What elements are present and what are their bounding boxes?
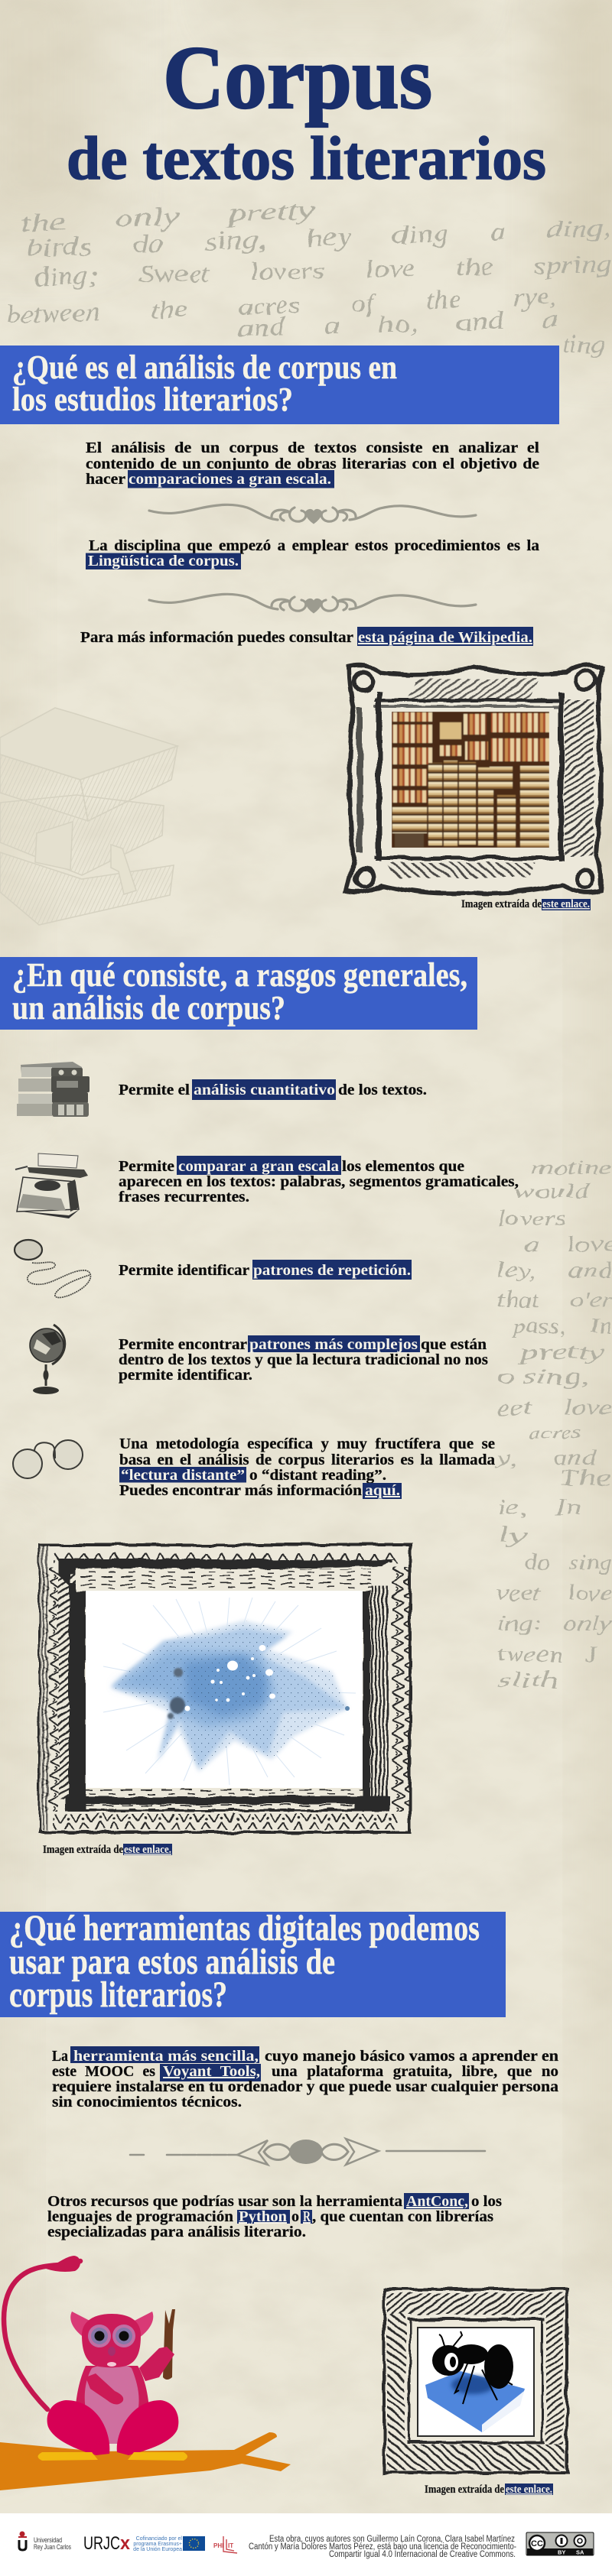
left arm (86, 2373, 123, 2405)
icon: pocket watch (15, 1240, 90, 1298)
text: comparar a gran escala: comparar a gran escala (178, 1158, 339, 1175)
text block: definición: hacer (86, 471, 125, 488)
text block: definición: El análisis de un corpus de textos consiste en analizar el (86, 440, 539, 456)
icon: stack of old books (17, 1062, 90, 1117)
text: patrones más complejos: Permite encontrar (119, 1336, 247, 1353)
text block: disciplina: La disciplina que empezó a emplear estos procedimientos es la (89, 537, 539, 554)
text block: Voyant Tools: requiere instalarse en tu ordenador y que puede usar cualquier persona (52, 2078, 558, 2095)
text block: Voyant Tools: herramienta más sencilla, (73, 2048, 259, 2065)
text: lectura distante: basa en el análisis de corpus literarios es la llamada (119, 1452, 495, 1468)
text block: Voyant Tools: cuyo manejo básico vamos a aprender en (265, 2048, 558, 2065)
license text: Cantón y María Dolores Martos Pérez, está bajo una licencia de Reconocimiento- (249, 2542, 516, 2552)
picture frame with network graph (38, 1545, 410, 1832)
text: lectura distante (119, 1436, 495, 1499)
text: patrones más complejos: permite identificar. (119, 1367, 252, 1384)
logo: URJCx: URJC (83, 2533, 120, 2554)
head (82, 2314, 141, 2367)
caption 3: Imagen extraída de (425, 2484, 504, 2496)
caption 2: este enlace. (124, 1844, 171, 1856)
handwriting: right background: slith (497, 1669, 558, 1692)
caption 3: este enlace. (506, 2484, 552, 2496)
text block: más información (80, 627, 533, 646)
logo: Erasmus+ EU co-funding: de la Unión Europea (133, 2547, 182, 2552)
ornament divider 1 (149, 504, 476, 523)
heading banner 3: corpus literarios? (9, 1974, 227, 2015)
logo: PHILLIT: IT (228, 2542, 233, 2549)
logo: Universidad Rey Juan Carlos: Rey Juan Carlos (34, 2543, 71, 2551)
logo: PHILLIT (213, 2536, 237, 2553)
handwriting: right background: lovers (497, 1207, 566, 1231)
text block: Voyant Tools: La (52, 2048, 68, 2065)
handwriting: right background (494, 1157, 612, 1692)
text: análisis cuantitativo: análisis cuantitativo (194, 1082, 335, 1098)
text block: más información: Para más información puedes consultar (80, 629, 353, 646)
heading banner 3: ¿Qué herramientas digitales podemos (9, 1908, 480, 1948)
handwriting: right background: ing: only (497, 1612, 612, 1636)
text: lectura distante: o “distant reading”. (249, 1467, 386, 1484)
icon: Creative Commons BY-SA badge: SA (576, 2548, 584, 2556)
handwriting: top background: the only pretty (20, 196, 315, 238)
branch (0, 2432, 291, 2490)
right arm (139, 2347, 174, 2381)
text block: otros recursos: Otros recursos que podrías usar son la herramienta (47, 2193, 402, 2210)
license text: Compartir Igual 4.0 Internacional de Creative Commons. (329, 2550, 516, 2559)
text: lectura distante: aquí. (365, 1482, 400, 1499)
ears (70, 2312, 96, 2338)
handwriting: top background (5, 196, 612, 358)
heading banner 2: ¿En qué consiste, a rasgos generales, (12, 956, 467, 994)
caption 1: este enlace. (542, 898, 590, 910)
panel: ¿Qué herramientas digitales? (0, 1908, 567, 2496)
text block: otros recursos: R (303, 2208, 311, 2225)
handwriting: top background: ding; Sweet lovers love the spring (34, 251, 612, 291)
panel: ¿En qué consiste? (0, 956, 519, 1856)
icon: typewriter (15, 1153, 88, 1218)
text: patrones más complejos: que están (421, 1336, 487, 1353)
text: comparar a gran escala: aparecen en los textos: palabras, segmentos gramaticales, (119, 1173, 519, 1190)
text: lectura distante: Puedes encontrar más información (119, 1482, 362, 1499)
title (67, 28, 546, 193)
text: patrones de repetición (119, 1260, 412, 1280)
text block: definición: contenido de un conjunto de obras literarias con el objetivo de (86, 456, 539, 472)
text: comparar a gran escala: frases recurrentes. (119, 1189, 249, 1205)
illustration: pink tarsier on a branch (0, 2256, 291, 2490)
icon: globe (30, 1325, 65, 1394)
text block: definición: comparaciones a gran escala. (129, 471, 331, 488)
text: análisis cuantitativo: Permite el (119, 1082, 190, 1098)
feet (38, 2452, 187, 2461)
text block: otros recursos: o (291, 2208, 299, 2225)
text block: más información: esta página de Wikipedia. (358, 629, 532, 646)
stick (163, 2309, 175, 2380)
heading banner 2 (0, 956, 477, 1030)
text: comparar a gran escala: los elementos que (342, 1158, 464, 1175)
text block: Voyant Tools: sin conocimientos técnicos. (52, 2094, 242, 2110)
icon: Creative Commons BY-SA badge: CC (531, 2539, 543, 2548)
text block: otros recursos (47, 2193, 502, 2240)
heading banner 3 (0, 1908, 506, 2017)
illustration: stack of books watermark (0, 708, 177, 925)
eyes (88, 2325, 135, 2367)
footer (0, 2513, 612, 2576)
text block: Voyant Tools: Voyant Tools, (163, 2063, 260, 2080)
body (75, 2366, 149, 2442)
text: patrones más complejos: dentro de los textos y que la lectura tradicional no nos (119, 1351, 488, 1368)
text: análisis cuantitativo: de los textos. (338, 1082, 427, 1098)
heading banner 1: los estudios literarios? (12, 381, 293, 418)
handwriting: right background: eet love (497, 1395, 612, 1420)
heading banner 3: usar para estos análisis de (9, 1942, 335, 1982)
icon: Creative Commons BY-SA badge (526, 2532, 594, 2556)
text: lectura distante: “lectura distante” (121, 1467, 245, 1484)
text block: otros recursos: o los (471, 2193, 502, 2210)
logo: PHILLIT: PHI (213, 2542, 223, 2549)
text: patrones de repetición: patrones de repetición. (253, 1262, 411, 1279)
heading banner 1 (0, 346, 559, 424)
bookshelf photo (392, 712, 549, 848)
network graph (86, 1591, 363, 1788)
logo: Erasmus+ EU co-funding: Cofinanciado por el (136, 2536, 182, 2542)
text block: Voyant Tools (52, 2046, 558, 2110)
handwriting: right background: that o'er (497, 1289, 612, 1312)
handwriting: top background: ting (562, 331, 604, 358)
title: de textos literarios (67, 125, 546, 193)
text block: definición (86, 440, 539, 488)
icon: pince-nez glasses (13, 1440, 83, 1478)
text: patrones más complejos: patrones más complejos (249, 1336, 418, 1353)
handwriting: right background: do sing (524, 1551, 612, 1575)
logo: Universidad Rey Juan Carlos (18, 2532, 71, 2551)
logo: Erasmus+ EU co-funding: programa Erasmus+ (133, 2542, 182, 2547)
handwriting: right background: acres (528, 1423, 581, 1443)
handwriting: right background: veet love (497, 1582, 612, 1605)
text block: otros recursos: Python (239, 2208, 287, 2225)
text: patrones más complejos (119, 1335, 488, 1384)
text: patrones de repetición: Permite identificar (119, 1262, 249, 1279)
ant on blue book (425, 2331, 525, 2432)
handwriting: right background: ly (497, 1523, 529, 1547)
panel: ¿Qué es el análisis de corpus? (0, 346, 601, 925)
picture frame with AntConc logo (384, 2289, 567, 2473)
license text: Esta obra, cuyos autores son Guillermo Laín Corona, Clara Isabel Martínez (269, 2535, 515, 2544)
text: comparar a gran escala (119, 1156, 519, 1205)
caption 2: Imagen extraída de (43, 1844, 123, 1856)
handwriting: top background: birds do sing, hey ding a ding, (26, 214, 612, 262)
belly (85, 2363, 139, 2444)
text block: otros recursos: AntConc, (406, 2193, 468, 2210)
handwriting: top background: between the acres of the rye, (5, 283, 557, 329)
heading banner 2: un análisis de corpus? (12, 989, 285, 1027)
logo: URJCx: x (120, 2533, 131, 2554)
handwriting: right background: ley, and (497, 1259, 612, 1283)
text: análisis cuantitativo (119, 1079, 427, 1100)
icon: Creative Commons BY-SA badge: BY (558, 2548, 565, 2556)
text: lectura distante: Una metodología específica y muy fructífera que se (119, 1436, 495, 1452)
tail (4, 2261, 80, 2409)
handwriting: right background: would (514, 1180, 591, 1202)
handwriting: right background: a love (524, 1231, 612, 1257)
handwriting: right background: pass, In (511, 1315, 612, 1338)
handwriting: right background: o sing, (497, 1365, 589, 1389)
text block: otros recursos: , que cuentan con librerías (312, 2208, 493, 2225)
handwriting: right background: pretty (518, 1341, 605, 1364)
handwriting: right background: tween J (497, 1643, 598, 1666)
handwriting: right background: y, and (494, 1446, 597, 1470)
text block: disciplina (86, 537, 539, 569)
caption 1: Imagen extraída de (461, 898, 542, 910)
text block: Voyant Tools: una plataforma gratuita, libre, que no (272, 2063, 558, 2080)
ornament divider 2 (149, 594, 476, 612)
picture frame with bookshelf photo (347, 665, 601, 894)
text block: otros recursos: especializadas para análisis literario. (47, 2224, 306, 2240)
handwriting: right background: ie, In (497, 1496, 581, 1520)
text block: otros recursos: lenguajes de programación (47, 2208, 233, 2225)
legs (47, 2400, 178, 2455)
text: comparar a gran escala: Permite (119, 1158, 174, 1175)
title: Corpus (163, 28, 432, 128)
text block: disciplina: Lingüística de corpus. (88, 553, 239, 569)
text block: Voyant Tools: este MOOC es (52, 2063, 155, 2080)
logo: Universidad Rey Juan Carlos: Universidad (34, 2536, 62, 2544)
handwriting: top background: and a ho, and a (236, 306, 558, 342)
logo: Erasmus+ EU co-funding (133, 2536, 205, 2552)
handwriting: right background: motine (532, 1157, 612, 1179)
heading banner 1: ¿Qué es el análisis de corpus en (12, 349, 397, 386)
ornament divider 3 (130, 2139, 485, 2165)
handwriting: right background: The (558, 1467, 612, 1491)
license text (249, 2535, 516, 2559)
